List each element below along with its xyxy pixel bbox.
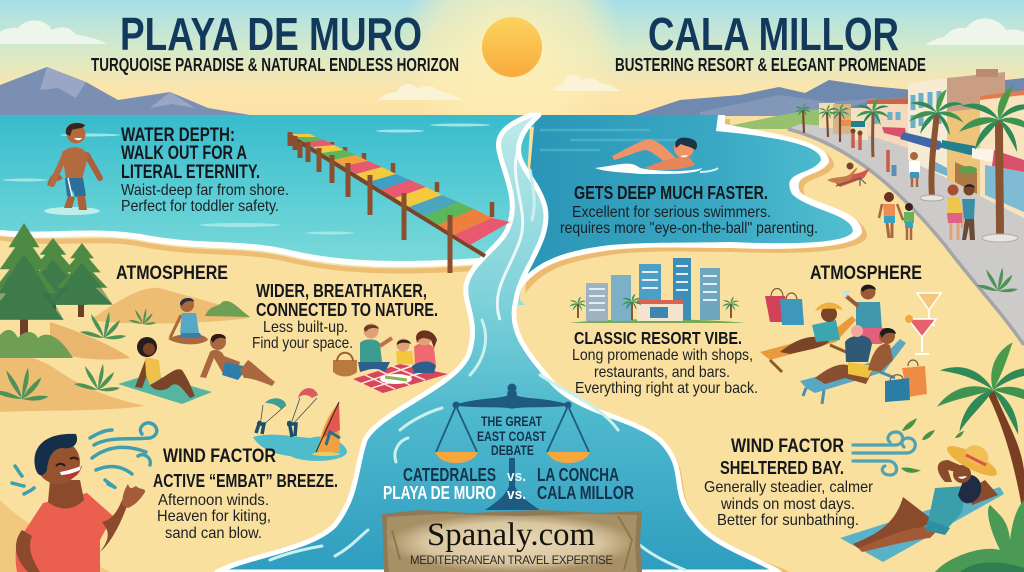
scale right pan (547, 406, 590, 463)
comparison labels: LA CONCHA (537, 465, 619, 485)
text block: Cala Millor wind factor: Generally steadier, calmer (704, 479, 874, 496)
pier front posts (290, 132, 450, 273)
shopping bags and loungers (760, 284, 941, 404)
right beach sand (520, 127, 1024, 572)
text block: Cala Millor atmosphere: Long promenade with shops, (572, 347, 753, 364)
text block: Cala Millor water depth: GETS DEEP MUCH FASTER. (574, 183, 768, 203)
promenade buildings (819, 69, 1024, 218)
heading: Playa atmosphere: ATMOSPHERE (116, 263, 228, 284)
walking couple (947, 184, 975, 240)
parchment sign (382, 510, 642, 572)
sunbathing woman with hat (840, 441, 1004, 562)
lounger with man (800, 325, 906, 404)
text block: Playa atmosphere (252, 281, 438, 352)
wind icon right (853, 418, 964, 475)
text block: Playa water depth: Waist-deep far from shore. (121, 182, 289, 199)
title: Cala Millor: CALA MILLOR (648, 8, 899, 60)
background: sky (0, 0, 1024, 116)
text block: Playa water depth: Perfect for toddler safety. (121, 198, 279, 215)
comparison labels: CALA MILLOR (537, 483, 634, 503)
heading: Cala Millor atmosphere: ATMOSPHERE (810, 263, 922, 284)
big palm tree (937, 342, 1024, 520)
family picnic (333, 324, 448, 393)
palm trees (795, 86, 1024, 242)
text block: Playa atmosphere: WIDER, BREATHTAKER, (256, 281, 427, 301)
woman sitting cross-legged (168, 298, 208, 344)
text block: Playa wind factor: Heaven for kiting, (157, 508, 271, 525)
title: Playa de Muro: PLAYA DE MURO (120, 8, 422, 60)
scale post and base (485, 458, 540, 510)
mother and child on beach (879, 192, 914, 240)
text block: Cala Millor atmosphere: Everything right at your back. (575, 380, 758, 397)
debate heading: EAST COAST (477, 428, 546, 444)
pier back posts (332, 142, 492, 217)
standing man with drink (842, 284, 884, 344)
green land (722, 108, 830, 129)
comparison labels: vs. (507, 486, 526, 503)
green shrubs (0, 301, 250, 358)
agave plants (0, 308, 156, 401)
city skyline icon (569, 258, 745, 323)
sea highlights (3, 124, 490, 234)
comparison labels: CATEDRALES (403, 465, 496, 485)
text block: Playa water depth: WATER DEPTH: (121, 125, 235, 146)
text block: Cala Millor wind factor: Better for sunbathing. (717, 512, 859, 529)
text block: Playa wind factor: Afternoon winds. (158, 492, 269, 509)
wind swirls (12, 423, 157, 494)
woman sitting on towel (118, 337, 212, 404)
text block: Playa atmosphere: CONNECTED TO NATURE. (256, 300, 438, 320)
text block: Playa atmosphere: Less built-up. (263, 319, 348, 336)
scale left pan (435, 406, 478, 463)
text block: Playa wind factor (153, 471, 338, 542)
heading: Playa wind factor: WIND FACTOR (163, 446, 276, 467)
comparison labels: vs. (507, 468, 526, 485)
sand dunes (0, 288, 250, 572)
left sea (0, 115, 560, 305)
text block: Playa wind factor: sand can blow. (165, 525, 262, 542)
reader on beach chair (827, 162, 870, 187)
bottom-right foliage (935, 500, 1024, 572)
text block: Playa water depth (121, 125, 289, 215)
text block: Cala Millor wind factor: winds on most days. (720, 496, 855, 513)
text block: Cala Millor atmosphere: CLASSIC RESORT VIBE. (574, 328, 742, 348)
right mountains (635, 78, 1024, 116)
central turquoise river (217, 115, 779, 572)
colourful pier (290, 132, 510, 273)
text block: Cala Millor wind factor (704, 458, 874, 529)
promenade agave (976, 268, 1018, 292)
shopping bags small (885, 360, 927, 402)
pier planks (292, 134, 510, 245)
sign tagline: MEDITERRANEAN TRAVEL EXPERTISE (410, 555, 613, 567)
laughing man with wind (12, 423, 157, 572)
comparison labels (383, 465, 634, 503)
distant walkers (853, 130, 888, 172)
sign wordmark: Spanaly.com (427, 517, 595, 553)
walking man in white shirt (909, 152, 920, 187)
kite surfers and windsurfer (253, 388, 347, 461)
cocktails (905, 293, 941, 354)
man reclining (200, 334, 275, 386)
text block: Cala Millor water depth: requires more "eye-on-the-ball" parenting. (560, 220, 818, 237)
left mountains (0, 67, 250, 115)
text block: Cala Millor atmosphere (572, 328, 758, 397)
swimmer (595, 138, 718, 174)
promenade (788, 124, 1024, 345)
left beach sand (0, 233, 495, 572)
pine trees (0, 223, 113, 338)
scales of justice (435, 384, 590, 510)
icon: sun with glow (400, 0, 624, 159)
lounger with woman (760, 303, 856, 372)
scale beam (456, 392, 568, 408)
text block: Playa atmosphere: Find your space. (252, 335, 353, 352)
text block: Cala Millor wind factor: SHELTERED BAY. (720, 458, 844, 478)
heading: Cala Millor wind factor: WIND FACTOR (731, 436, 844, 457)
text block: Cala Millor atmosphere: restaurants, and bars. (594, 364, 730, 381)
river sand shadow (510, 300, 790, 572)
debate heading: DEBATE (491, 442, 534, 458)
subtitle: Playa de Muro: TURQUOISE PARADISE & NATURAL ENDLESS HORIZON (91, 54, 459, 75)
man wading in shallow water (44, 123, 100, 215)
comparison labels: PLAYA DE MURO (383, 483, 496, 503)
text block: Playa wind factor: ACTIVE “EMBAT” BREEZE. (153, 471, 338, 491)
text block: Cala Millor water depth (560, 183, 818, 237)
text block: Playa water depth: WALK OUT FOR A (121, 143, 247, 164)
debate heading (477, 413, 546, 458)
clouds (0, 18, 1024, 100)
shopping bags (765, 288, 804, 325)
text block: Playa water depth: LITERAL ETERNITY. (121, 162, 260, 183)
text block: Cala Millor water depth: Excellent for serious swimmers. (572, 204, 771, 221)
right deep-water bay (520, 115, 867, 294)
people on the promenade (850, 128, 975, 240)
beach towel sunbathers (118, 298, 275, 404)
debate heading: THE GREAT (481, 413, 542, 429)
pier side beam (290, 136, 485, 256)
